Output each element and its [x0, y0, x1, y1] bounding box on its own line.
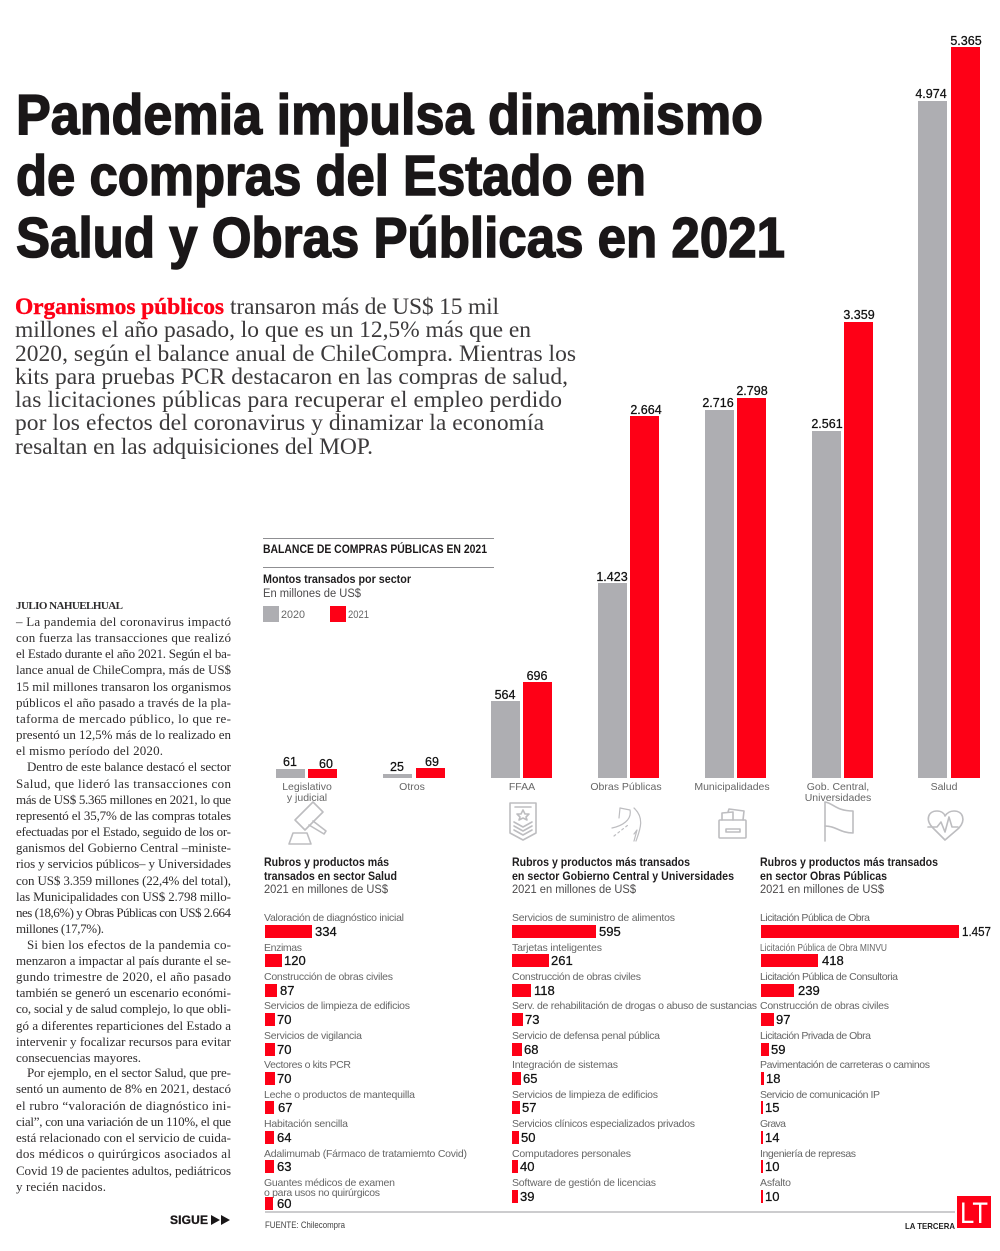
horizontal bars: Salud: Habitación sencilla: [264, 1118, 348, 1130]
panel heading: 2021 en millones de US$: [512, 884, 637, 896]
horizontal bars: Obras Públicas: Ingeniería de represas: [760, 1148, 856, 1160]
horizontal bars: Salud: 334: [315, 924, 337, 939]
bar chart: montos por sector: [276, 34, 982, 804]
bars: Gob. Central, Universidades: 2.561: [811, 417, 843, 431]
horizontal bars: Obras Públicas: 1.457: [962, 924, 991, 939]
intro text: millones el año pasado, lo que es un 12,5% más que en: [15, 317, 531, 343]
article body text: – La pandemia del coronavirus impactó: [15, 614, 231, 629]
article body text: nes (18,6%) y Obras Públicas con US$ 2.664: [16, 905, 232, 920]
horizontal bars: Gobierno Central: 50: [521, 1130, 535, 1145]
article body text: intervenir y focalizar recursos para evitar: [16, 1034, 232, 1049]
intro text: las licitaciones públicas para recuperar el empleo perdido: [15, 387, 562, 413]
legend: [263, 606, 369, 622]
bars: FFAA: 696: [527, 669, 547, 683]
article body text: Dentro de este balance destacó el sector: [27, 759, 232, 774]
article body text: efectuadas por el Estado, seguido de los or-: [16, 824, 231, 839]
horizontal bars: Obras Públicas: Servicio de comunicación IP: [760, 1089, 880, 1101]
horizontal bars: Salud: 67: [278, 1100, 292, 1115]
sigue marker: [170, 1213, 230, 1227]
bars: Gob. Central, Universidades: 3.359: [843, 308, 875, 322]
logo: LT: LT: [960, 1197, 988, 1230]
horizontal bars: Gobierno Central: Servicio de defensa penal pública: [512, 1030, 660, 1042]
article body text: cial”, con una variación de un 110%, el que: [16, 1114, 231, 1129]
article body text: también se generó un escenario económi-: [16, 985, 231, 1000]
panel heading: 2021 en millones de US$: [760, 884, 885, 896]
article body text: públicos el año pasado a través de la pla-: [16, 695, 231, 710]
intro text: Organismos públicos: [15, 294, 224, 320]
bars: Municipalidades: [694, 384, 770, 793]
title: [16, 83, 785, 270]
title: Pandemia impulsa dinamismo: [16, 83, 763, 147]
horizontal bars: Salud: Servicios de limpieza de edificios: [264, 1000, 410, 1012]
panel heading: transados en sector Salud: [264, 871, 397, 883]
bars: Municipalidades: 2.716: [702, 396, 734, 410]
horizontal bars: Obras Públicas: Grava: [760, 1118, 786, 1130]
panel heading: Rubros y productos más transados: [760, 857, 938, 869]
horizontal bars: Gobierno Central: Servicios de suministro de alimentos: [512, 912, 675, 924]
horizontal bars: Gobierno Central: 261: [551, 953, 573, 968]
intro text: transaron más de US$ 15 mil: [230, 294, 499, 320]
horizontal bars: Gobierno Central: [512, 912, 757, 1204]
legend: 2021: [348, 609, 369, 621]
horizontal bars: Salud: Guantes médicos de examen: [264, 1177, 395, 1189]
intro text: resaltan en las adquisiciones del MOP.: [15, 434, 373, 460]
horizontal bars: Gobierno Central: 68: [524, 1042, 538, 1057]
panel: sector Gobierno Central y Universidades: [512, 857, 757, 1204]
title: Salud y Obras Públicas en 2021: [16, 206, 785, 270]
panel heading: [512, 857, 734, 896]
bars: Legislativo y judicial: 61: [283, 755, 297, 769]
bars: Municipalidades: 2.798: [736, 384, 768, 398]
horizontal bars: Salud: 64: [277, 1130, 291, 1145]
horizontal bars: Salud: Servicios de vigilancia: [264, 1030, 362, 1042]
intro text: por los efectos del coronavirus y dinamizar la economía: [15, 410, 545, 436]
horizontal bars: Salud: Vectores o kits PCR: [264, 1059, 351, 1071]
horizontal bars: Salud: Leche o productos de mantequilla: [264, 1089, 415, 1101]
horizontal bars: Obras Públicas: 14: [765, 1130, 779, 1145]
horizontal bars: Obras Públicas: 10: [765, 1189, 779, 1204]
article body text: con fuerza las transacciones que realizó: [16, 630, 231, 645]
article body text: el mismo período del 2020.: [16, 743, 163, 758]
article body text: ganismos del Gobierno Central –ministe-: [16, 840, 231, 855]
legend: 2020: [281, 609, 305, 621]
bars: Salud: Salud: [931, 781, 958, 793]
chart subtitle: Montos transados por sector: [263, 574, 411, 586]
bars: Salud: 4.974: [915, 87, 947, 101]
bars: Gob. Central, Universidades: [805, 308, 875, 804]
horizontal bars: Salud: 87: [280, 983, 294, 998]
source: FUENTE: Chilecompra: [265, 1220, 345, 1230]
horizontal bars: Salud: [264, 912, 467, 1211]
article body text: menzaron a impactar al país durante el se-: [16, 953, 231, 968]
article body text: con US$ 3.359 millones (22,4% del total),: [16, 873, 231, 888]
horizontal bars: Gobierno Central: 118: [534, 983, 555, 998]
bars: Obras Públicas: 2.664: [630, 403, 662, 417]
horizontal bars: Gobierno Central: 40: [520, 1159, 534, 1174]
chart heading: BALANCE DE COMPRAS PÚBLICAS EN 2021: [263, 541, 487, 556]
horizontal bars: Obras Públicas: 18: [766, 1071, 780, 1086]
intro text: kits para pruebas PCR destacaron en las compras de salud,: [15, 364, 568, 390]
horizontal bars: Obras Públicas: 10: [765, 1159, 779, 1174]
horizontal bars: Salud: Enzimas: [264, 942, 302, 954]
horizontal bars: Gobierno Central: 595: [599, 924, 621, 939]
horizontal bars: Obras Públicas: Pavimentación de carreteras o caminos: [760, 1059, 930, 1071]
icon: gavel: [289, 802, 326, 844]
icon: file cabinet: [719, 809, 746, 838]
horizontal bars: Obras Públicas: 239: [798, 983, 820, 998]
bars: Municipalidades: Municipalidades: [694, 781, 770, 793]
article body text: el Estado durante el año 2021. Según el ba-: [16, 646, 231, 661]
bars: Otros: 69: [425, 755, 439, 769]
article body text: más de US$ 5.365 millones en 2021, lo que: [16, 792, 231, 807]
horizontal bars: Salud: 70: [277, 1042, 291, 1057]
horizontal bars: Gobierno Central: 65: [523, 1071, 537, 1086]
panel heading: 2021 en millones de US$: [264, 884, 389, 896]
horizontal bars: Gobierno Central: Servicios clínicos especializados privados: [512, 1118, 695, 1130]
horizontal bars: Obras Públicas: [760, 912, 991, 1204]
panel heading: Rubros y productos más: [264, 857, 389, 869]
icon: heart with pulse: [928, 811, 963, 840]
horizontal bars: Gobierno Central: Software de gestión de licencias: [512, 1177, 656, 1189]
article body text: está relacionado con el servicio de cuida-: [16, 1130, 231, 1145]
horizontal bars: Obras Públicas: 97: [776, 1012, 790, 1027]
bars: Legislativo y judicial: [276, 755, 337, 804]
article body text: 15 mil millones transaron los organismos: [16, 679, 231, 694]
horizontal bars: Obras Públicas: 15: [765, 1100, 779, 1115]
horizontal bars: Gobierno Central: 73: [525, 1012, 539, 1027]
article body text: rios y servicios públicos– y Universidades: [16, 856, 231, 871]
article body text: Por ejemplo, en el sector Salud, que pre-: [27, 1065, 231, 1080]
horizontal bars: Obras Públicas: Licitación Pública de Obra MINVU: [760, 942, 887, 954]
horizontal bars: Salud: 70: [277, 1071, 291, 1086]
article body text: las Municipalidades con US$ 2.798 millo-: [16, 889, 231, 904]
article body text: gó a diferentes reparticiones del Estado a: [16, 1018, 231, 1033]
article body text: y recién nacidos.: [16, 1179, 106, 1194]
article body text: sentó un aumento de 8% en 2021, destacó: [16, 1081, 231, 1096]
horizontal bars: Gobierno Central: 39: [520, 1189, 534, 1204]
horizontal bars: Obras Públicas: Licitación Pública de Consultoria: [760, 971, 898, 983]
horizontal bars: Salud: 63: [277, 1159, 291, 1174]
horizontal bars: Salud: Adalimumab (Fármaco de tratamiemto Covid): [264, 1148, 467, 1160]
bars: FFAA: FFAA: [509, 781, 535, 793]
intro text: 2020, según el balance anual de ChileCompra. Mientras los: [15, 341, 576, 367]
horizontal bars: Salud: o para usos no quirúrgicos: [264, 1187, 380, 1199]
article body text: taforma de mercado público, lo que re-: [16, 711, 231, 726]
chart subtitle: En millones de US$: [263, 588, 362, 600]
bars: Otros: [383, 755, 445, 793]
horizontal bars: Gobierno Central: 57: [522, 1100, 536, 1115]
bars: Obras Públicas: 1.423: [596, 570, 628, 584]
sigue marker: SIGUE: [170, 1213, 208, 1227]
footer rule: [265, 1212, 955, 1213]
bars: Gob. Central, Universidades: Universidades: [805, 792, 871, 804]
panel heading: en sector Gobierno Central y Universidades: [512, 871, 734, 883]
icon: military shield: [510, 803, 536, 840]
horizontal bars: Obras Públicas: Asfalto: [760, 1177, 791, 1189]
brand name: LA TERCERA: [905, 1221, 955, 1231]
bars: Legislativo y judicial: Legislativo: [282, 781, 332, 793]
bars: FFAA: [491, 669, 552, 793]
chart subtitle: [263, 574, 411, 600]
article body text: el rubro “valoración de diagnóstico ini-: [16, 1098, 231, 1113]
bars: Obras Públicas: Obras Públicas: [590, 781, 662, 793]
horizontal bars: Obras Públicas: Licitación Privada de Obra: [760, 1030, 871, 1042]
article body text: JULIO NAHUELHUAL: [16, 600, 123, 612]
horizontal bars: Gobierno Central: Tarjetas inteligentes: [512, 942, 602, 954]
horizontal bars: Salud: 120: [284, 953, 306, 968]
bars: Gob. Central, Universidades: Gob. Central,: [807, 781, 869, 793]
bars: Salud: [915, 34, 982, 793]
horizontal bars: Obras Públicas: 418: [822, 953, 844, 968]
panel: sector Salud: [264, 857, 467, 1211]
icon: road: [612, 808, 641, 841]
horizontal bars: Gobierno Central: Integración de sistemas: [512, 1059, 618, 1071]
panel heading: Rubros y productos más transados: [512, 857, 690, 869]
article body text: co, social y de salud complejo, lo que obli-: [16, 1001, 231, 1016]
bars: Legislativo y judicial: y judicial: [287, 792, 327, 804]
bars: Otros: 25: [390, 760, 404, 774]
bars: Salud: 5.365: [950, 34, 982, 48]
bars: Otros: Otros: [399, 781, 425, 793]
article body text: presentó un 12,5% más de lo realizado en: [16, 727, 232, 742]
article body text: gundo trimestre de 2020, el año pasado: [16, 969, 231, 984]
horizontal bars: Gobierno Central: Servicios de limpieza de edificios: [512, 1089, 658, 1101]
article body text: dos médicos o quirúrgicos asociados al: [16, 1146, 231, 1161]
article body text: [15, 600, 232, 1194]
article body text: lance anual de ChileCompra, más de US$: [16, 662, 232, 677]
title: de compras del Estado en: [16, 144, 646, 208]
article body text: representó el 35,7% de las compras totales: [16, 808, 231, 823]
horizontal bars: Salud: 70: [277, 1012, 291, 1027]
horizontal bars: Obras Públicas: Construcción de obras civiles: [760, 1000, 889, 1012]
horizontal bars: Gobierno Central: Construcción de obras civiles: [512, 971, 641, 983]
article body text: Salud, que lideró las transacciones con: [16, 776, 232, 791]
bars: Obras Públicas: [590, 403, 662, 793]
horizontal bars: Obras Públicas: 59: [771, 1042, 785, 1057]
horizontal bars: Salud: 60: [277, 1196, 291, 1211]
panel heading: [760, 857, 938, 896]
bars: Legislativo y judicial: 60: [319, 757, 333, 771]
icon: flag: [825, 802, 853, 841]
panel heading: [264, 857, 397, 896]
intro text: [15, 294, 576, 460]
horizontal bars: Obras Públicas: Licitación Pública de Obra: [760, 912, 870, 924]
article body text: consecuencias mayores.: [16, 1050, 141, 1065]
horizontal bars: Salud: Construcción de obras civiles: [264, 971, 393, 983]
article body text: Si bien los efectos de la pandemia co-: [27, 937, 231, 952]
panel: sector Obras Públicas: [760, 857, 991, 1204]
horizontal bars: Gobierno Central: Serv. de rehabilitación de drogas o abuso de sustancias: [512, 1000, 757, 1012]
panel heading: en sector Obras Públicas: [760, 871, 887, 883]
article body text: millones (17,7%).: [16, 921, 104, 936]
horizontal bars: Salud: Valoración de diagnóstico inicial: [264, 912, 404, 924]
horizontal bars: Gobierno Central: Computadores personales: [512, 1148, 631, 1160]
bars: FFAA: 564: [495, 688, 515, 702]
article body text: Covid 19 de pacientes adultos, pediátricos: [16, 1163, 231, 1178]
